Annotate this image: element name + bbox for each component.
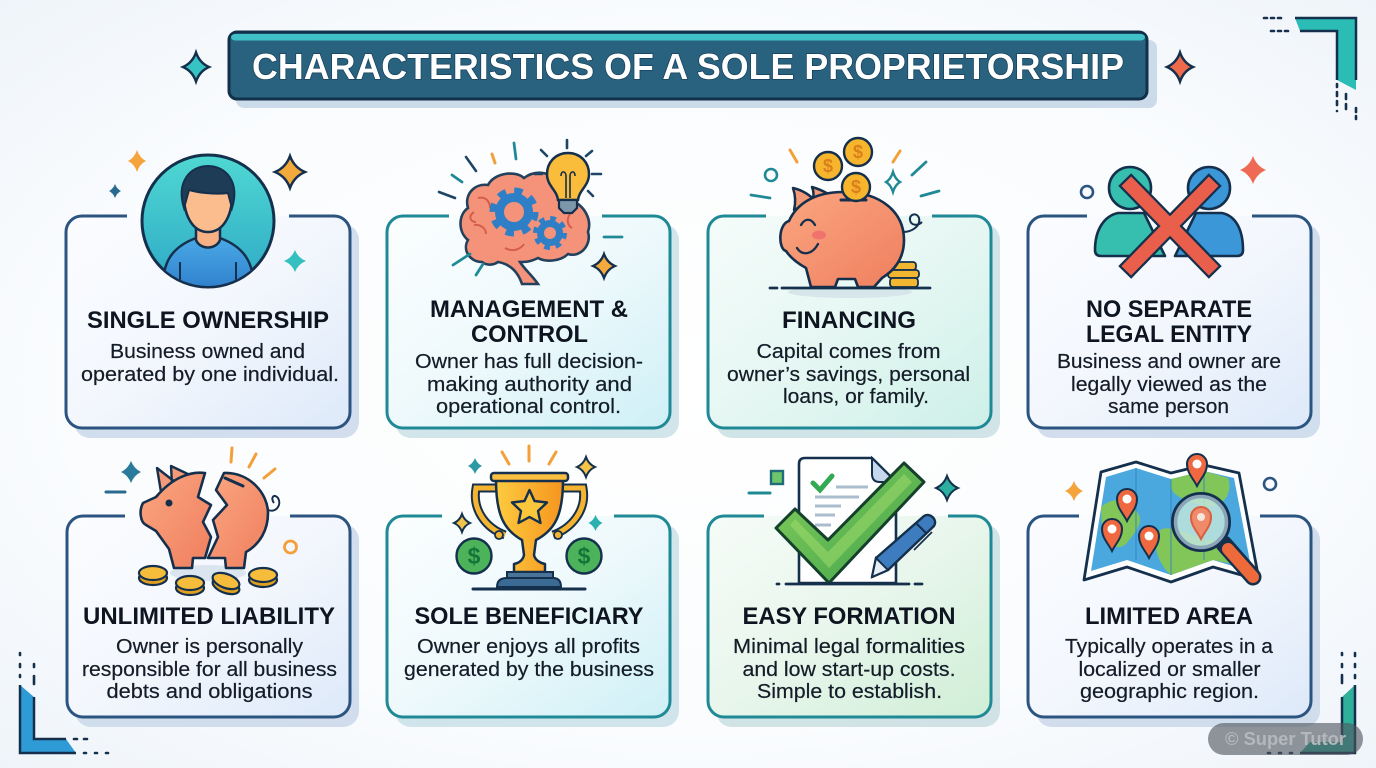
- watermark: © Super Tutor: [1225, 729, 1346, 749]
- description: Typically operates in a: [1065, 636, 1274, 658]
- description: [82, 636, 337, 703]
- icon: trophy with coins: $: [578, 543, 591, 569]
- description: [1065, 636, 1274, 703]
- heading: FINANCING: [782, 307, 916, 334]
- icon: light bulb: [547, 153, 589, 213]
- icon: broken piggy bank: [106, 448, 296, 597]
- scattered coins: [139, 566, 277, 597]
- description: [415, 351, 643, 418]
- description: [1057, 351, 1281, 418]
- icon: sparkles: [109, 150, 306, 272]
- coin stack: [888, 262, 919, 287]
- card: financing: [708, 138, 1000, 438]
- icon: map with pins and magnifier: [1065, 454, 1276, 582]
- description: Capital comes from: [756, 341, 940, 363]
- card: easy formation: [708, 458, 1000, 727]
- description: same person: [1108, 396, 1229, 418]
- icon: piggy bank with coins: [751, 138, 939, 298]
- falling coins: [814, 138, 872, 201]
- icon: brain with gears and bulb: [439, 140, 622, 284]
- icon: piggy bank with coins: $: [851, 177, 861, 197]
- corner ornament: bottom right: [1268, 653, 1355, 753]
- icon: trophy with coins: [454, 446, 602, 589]
- description: Owner enjoys all profits: [417, 636, 640, 658]
- description: Minimal legal formalities: [733, 636, 965, 658]
- title text: CHARACTERISTICS OF A SOLE PROPRIETORSHIP: [252, 46, 1124, 87]
- description: Business and owner are: [1057, 351, 1281, 373]
- heading: UNLIMITED LIABILITY: [83, 603, 335, 630]
- card: management and control: [387, 140, 679, 438]
- icon: piggy bank with coins: $: [853, 142, 863, 162]
- description: Owner is personally: [116, 636, 303, 658]
- card: no separate legal entity: [1028, 156, 1320, 438]
- description: geographic region.: [1080, 681, 1259, 703]
- left half: [141, 473, 211, 568]
- description: [81, 341, 339, 386]
- heading: CONTROL: [471, 321, 588, 348]
- card: sole beneficiary: [387, 446, 679, 727]
- pen: [872, 515, 935, 577]
- description: Business owned and: [110, 341, 305, 363]
- title banner: [229, 32, 1157, 108]
- description: [404, 636, 654, 681]
- card: unlimited liability: [67, 448, 359, 727]
- ground line: [770, 287, 930, 289]
- heading: EASY FORMATION: [742, 603, 956, 630]
- heading: SINGLE OWNERSHIP: [87, 307, 329, 334]
- description: debts and obligations: [106, 681, 312, 703]
- card: limited area: [1028, 454, 1320, 727]
- icon: trophy with coins: $: [468, 543, 481, 569]
- description: Owner has full decision-: [415, 351, 643, 373]
- description: legally viewed as the: [1071, 374, 1267, 396]
- description: Simple to establish.: [757, 681, 942, 703]
- icon: right title sparkle: [1167, 52, 1193, 82]
- description: operational control.: [436, 396, 621, 418]
- heading: MANAGEMENT &: [430, 296, 628, 323]
- heading: [1086, 296, 1252, 348]
- description: localized or smaller: [1078, 659, 1261, 681]
- magnifier: [1174, 495, 1253, 577]
- description: responsible for all business: [82, 659, 337, 681]
- icon: two people crossed out: [1081, 156, 1266, 266]
- map pins: [1102, 454, 1211, 558]
- description: generated by the business: [404, 659, 654, 681]
- description: making authority and: [427, 374, 632, 396]
- description: owner’s savings, personal: [727, 364, 970, 386]
- right half: [208, 473, 268, 568]
- description: [727, 341, 970, 408]
- card: single ownership: [66, 150, 359, 438]
- icon: person in circle: [142, 155, 274, 290]
- heading: NO SEPARATE: [1086, 296, 1252, 323]
- icon: document with check mark and pen: [749, 458, 958, 584]
- heading: LIMITED AREA: [1085, 603, 1253, 630]
- icon: left title sparkle: [183, 52, 209, 82]
- icon: piggy bank with coins: $: [823, 156, 833, 176]
- watermark: [1208, 723, 1363, 755]
- description: loans, or family.: [783, 386, 929, 408]
- corner ornament: bottom left: [20, 653, 108, 753]
- description: [733, 636, 965, 703]
- corner ornament: top right: [1264, 18, 1356, 119]
- description: operated by one individual.: [81, 364, 339, 386]
- heading: SOLE BENEFICIARY: [414, 603, 644, 630]
- heading: [430, 296, 628, 348]
- description: and low start-up costs.: [742, 659, 956, 681]
- heading: LEGAL ENTITY: [1086, 321, 1252, 348]
